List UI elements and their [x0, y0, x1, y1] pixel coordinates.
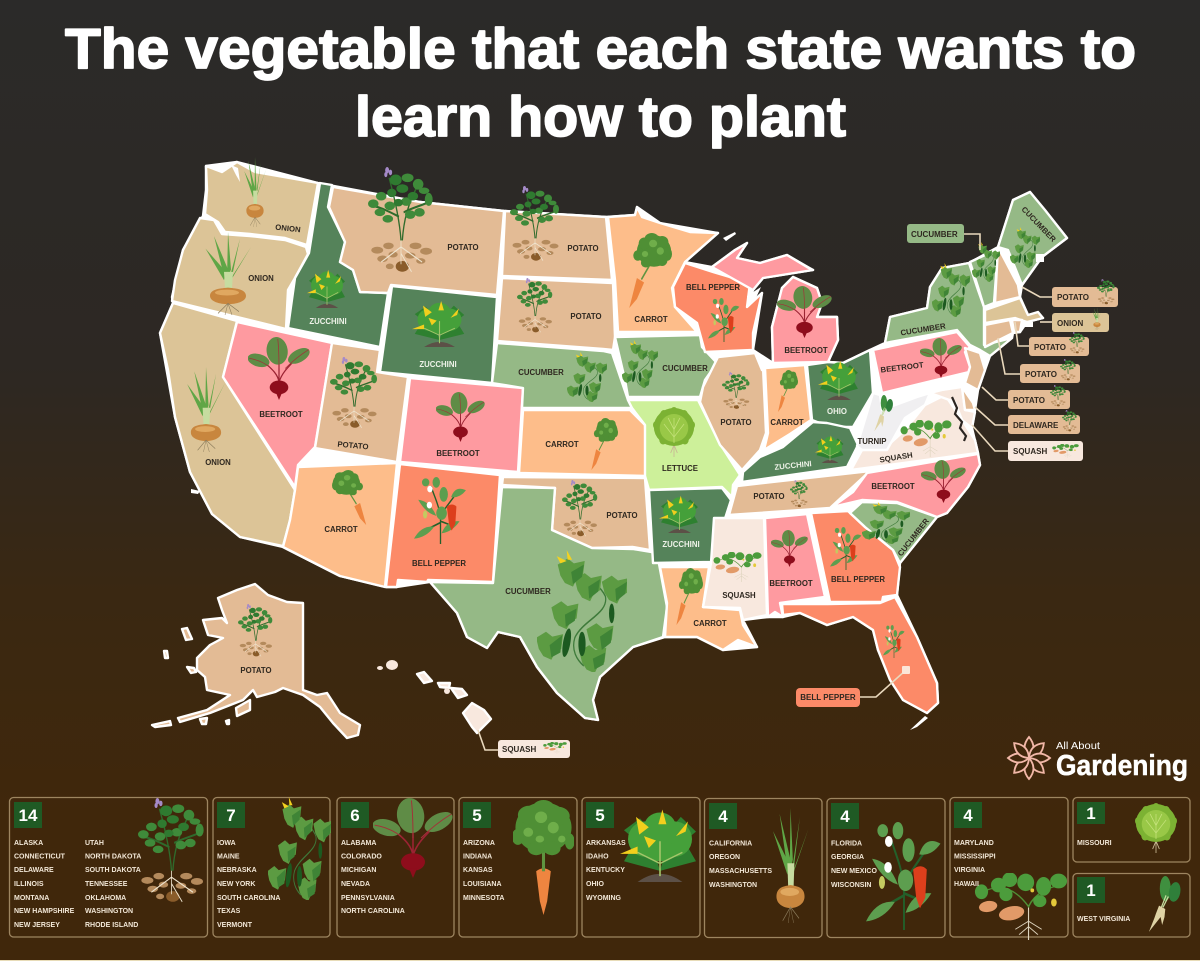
label: Indiana: CARROT [770, 418, 804, 427]
icon: potato, Illinois [722, 372, 749, 409]
icon: squash, Virginia [901, 420, 951, 457]
state: Connecticut [985, 320, 1013, 347]
label: Oklahoma: POTATO [606, 511, 638, 520]
callout: Hawaii squash: SQUASH [502, 745, 536, 754]
icon: potato, South Dakota [517, 278, 552, 332]
callout: Delaware potato [975, 407, 1080, 434]
label: West Virginia: TURNIP [857, 437, 887, 446]
callout: Massachusetts onion: ONION [1057, 319, 1083, 328]
panel: potato, 14 states: NORTH DAKOTA [85, 854, 141, 860]
callout: Vermont cucumber: CUCUMBER [911, 230, 958, 239]
panel: beetroot, 6 states: ALABAMA [341, 840, 376, 847]
icon: carrot, Kansas [591, 418, 618, 470]
callout: Hawaii squash [478, 730, 570, 758]
label: Kansas: CARROT [545, 440, 579, 449]
label: Texas: CUCUMBER [505, 587, 551, 596]
state: Utah [315, 343, 408, 462]
state: Wyoming [380, 286, 497, 383]
state: Michigan upper peninsula [712, 243, 813, 290]
label: Wisconsin: BELL PEPPER [686, 283, 740, 292]
panel: beetroot, 6 states: NORTH CAROLINA [341, 908, 405, 915]
panel: potato, 14 states: NEW JERSEY [14, 922, 60, 929]
panel: carrot, 5 states: 5 [472, 806, 482, 825]
callout: Connecticut potato: POTATO [1025, 370, 1057, 379]
icon: onion, Oregon [206, 232, 251, 315]
panel: squash, 4 states: MARYLAND [954, 840, 994, 847]
panel: bell pepper, 4 states [827, 798, 945, 938]
icon: carrot, Arizona [332, 470, 366, 525]
callout: Florida bell pepper: BELL PEPPER [800, 693, 856, 702]
state: Idaho [288, 183, 388, 347]
panel: onion, 4 states: WASHINGTON [709, 882, 757, 889]
coastal fragments [191, 165, 1044, 730]
panel: carrot, 5 states: KANSAS [463, 867, 493, 874]
state: Oregon [172, 218, 308, 329]
icon: zucchini, Idaho [307, 270, 345, 308]
icon: potato, Utah [330, 357, 377, 428]
state: Nevada [223, 322, 332, 487]
panel: onion, 4 states: OREGON [709, 854, 740, 861]
panel: squash, 4 states: MISSISSIPPI [954, 854, 996, 860]
state: Iowa [615, 335, 717, 397]
state: Alaska [178, 584, 360, 738]
panel: carrot, 5 states [459, 798, 577, 937]
icon: cucumber, Texas [536, 550, 629, 673]
state: Vermont [970, 249, 998, 307]
state: Rhode Island [1012, 320, 1022, 332]
panel: lettuce, 1 state: MISSOURI [1077, 840, 1112, 847]
label: Tennessee: POTATO [753, 492, 785, 501]
panel: beetroot, 6 states: 6 [350, 806, 360, 825]
callout: Florida bell pepper [796, 666, 910, 707]
label: New York: CUCUMBER [900, 321, 947, 337]
panel: squash, 4 states: VIRGINIA [954, 867, 985, 874]
logo: All About Gardening [1008, 737, 1188, 782]
panel: carrot, 5 states: LOUISIANA [463, 881, 502, 888]
panel: zucchini, 5 states: KENTUCKY [586, 867, 625, 874]
label: Montana: POTATO [447, 243, 479, 252]
label: Oregon: ONION [248, 274, 274, 283]
icon: cucumber, Maine [1010, 227, 1041, 268]
icon: lettuce, Missouri [653, 407, 695, 457]
icon: potato, Tennessee [790, 480, 808, 507]
icon: bell pepper, Wisconsin [708, 298, 739, 342]
panel: potato, 14 states: CONNECTICUT [14, 854, 66, 860]
callout: New Hampshire potato [1022, 279, 1118, 307]
callout: Rhode Island potato [1015, 322, 1089, 356]
icon: cucumber, South Carolina [862, 502, 911, 544]
state: Tennessee [729, 471, 870, 515]
panel: zucchini, 5 states: 5 [595, 806, 605, 825]
label: Alabama: BEETROOT [769, 579, 813, 588]
state: South Carolina [850, 502, 937, 563]
panel: lettuce, 1 state: 1 [1086, 804, 1096, 823]
label: Michigan: BEETROOT [784, 346, 828, 355]
icon: squash, Mississippi [713, 552, 762, 582]
panel: cucumber, 7 states: NEBRASKA [217, 867, 257, 874]
label: South Carolina: CUCUMBER [896, 516, 931, 558]
state: Illinois [700, 353, 766, 470]
panel: beetroot, 6 states: MICHIGAN [341, 867, 376, 874]
label: Kentucky: ZUCCHINI [774, 459, 812, 472]
label: Georgia: BELL PEPPER [831, 575, 885, 584]
icon: bell pepper, New Mexico [414, 477, 466, 544]
icon: bell pepper, Florida [883, 625, 905, 658]
icon: cucumber, Iowa [622, 340, 659, 388]
panel: zucchini, 5 states: ARKANSAS [586, 840, 626, 847]
label: Missouri: LETTUCE [662, 464, 698, 473]
title: learn how to plant [355, 85, 846, 149]
state: Michigan lower peninsula [772, 277, 838, 363]
panel: zucchini, 5 states: IDAHO [586, 854, 609, 860]
state: Wisconsin [673, 263, 762, 352]
label: Ohio: OHIO [827, 407, 847, 416]
icon: cucumber, Vermont [972, 242, 1001, 282]
panel: beetroot, 6 states: COLORADO [341, 854, 382, 860]
brand text: All About [1056, 740, 1100, 752]
icon: zucchini, Kentucky [815, 436, 844, 463]
icon: potato, North Dakota [510, 186, 559, 261]
label: Louisiana: CARROT [693, 619, 727, 628]
callout: New Hampshire potato: POTATO [1057, 293, 1089, 302]
panel: turnip, 1 state: 1 [1086, 881, 1096, 900]
state: Oklahoma [502, 477, 650, 550]
callout: New Jersey potato [982, 385, 1070, 409]
map: white land underlay [160, 162, 1067, 720]
label: North Dakota: POTATO [567, 244, 599, 253]
state: Nebraska [492, 343, 632, 408]
callout: Vermont cucumber [907, 224, 980, 250]
state: Delaware [962, 387, 975, 410]
label: Arkansas: ZUCCHINI [662, 540, 700, 549]
state: Texas [430, 487, 667, 720]
icon: potato, Montana [368, 167, 433, 272]
state: Arkansas [649, 488, 731, 563]
label: New Mexico: BELL PEPPER [412, 559, 466, 568]
panel: potato, 14 states: SOUTH DAKOTA [85, 867, 141, 874]
panel: bell pepper, 4 states: NEW MEXICO [831, 868, 877, 875]
icon: potato, Alaska [238, 604, 272, 656]
icon: bell pepper, Georgia [830, 527, 861, 570]
panel: carrot, 5 states: ARIZONA [463, 840, 495, 847]
panel: squash, 4 states: HAWAII [954, 881, 979, 888]
label: California: ONION [205, 458, 231, 467]
state: Arizona [283, 463, 397, 587]
state: Ohio [807, 350, 873, 427]
panel: potato, 14 states: NEW HAMPSHIRE [14, 908, 75, 915]
state: South Dakota [497, 278, 615, 350]
panel: bell pepper, 4 states: GEORGIA [831, 854, 864, 861]
panel: cucumber, 7 states [213, 797, 332, 937]
title: The vegetable that each state wants to [65, 17, 1136, 81]
panel: cucumber, 7 states: MAINE [217, 854, 240, 860]
panel: cucumber, 7 states: 7 [226, 806, 236, 825]
icon: zucchini, Wyoming [412, 301, 464, 347]
label: Iowa: CUCUMBER [662, 364, 708, 373]
state: Colorado [400, 378, 523, 472]
panel: potato, 14 states: 14 [19, 806, 38, 825]
panel: onion, 4 states: CALIFORNIA [709, 840, 752, 848]
label: Washington: ONION [275, 223, 301, 234]
panel: turnip, 1 state: WEST VIRGINIA [1077, 916, 1130, 923]
label: North Carolina: BEETROOT [871, 482, 915, 491]
label: Mississippi: SQUASH [722, 591, 756, 600]
panel: potato, 14 states: DELAWARE [14, 867, 54, 874]
icon: carrot, Indiana [778, 370, 798, 412]
icon: cucumber, New York [932, 263, 971, 318]
icon: turnip, West Virginia [874, 395, 894, 431]
icon: cucumber, Nebraska [567, 352, 608, 402]
callout: Delaware potato: DELAWARE [1013, 421, 1059, 430]
callout: Connecticut potato [998, 338, 1080, 383]
icon: beetroot, Pennsylvania [919, 337, 963, 378]
callout: Maryland squash: SQUASH [1013, 447, 1047, 456]
label: Virginia: SQUASH [879, 450, 914, 465]
label: Colorado: BEETROOT [436, 449, 480, 458]
panel: cucumber, 7 states: TEXAS [217, 908, 241, 915]
label: Utah: POTATO [337, 440, 369, 451]
map: state shapes [152, 162, 1067, 738]
panel: squash, 4 states [950, 798, 1068, 940]
title [65, 17, 1136, 149]
panel: onion, 4 states [704, 798, 822, 938]
icon: beetroot, Alabama [770, 529, 809, 567]
legend [10, 796, 1190, 940]
state: North Dakota [502, 211, 612, 280]
state: New Hampshire [995, 247, 1020, 303]
brand text: Gardening [1056, 750, 1188, 782]
state: Mississippi [703, 518, 767, 620]
icon: carrot, Louisiana [676, 568, 703, 625]
panel: potato, 14 states: MONTANA [14, 895, 49, 902]
panel: turnip, 1 state [1073, 874, 1190, 937]
state: Maryland [930, 387, 975, 428]
panel: potato, 14 states: ALASKA [14, 840, 43, 847]
label: Minnesota: CARROT [634, 315, 668, 324]
state: Alabama [765, 514, 825, 617]
panel: bell pepper, 4 states: FLORIDA [831, 840, 862, 848]
state: North Carolina [832, 454, 980, 517]
label: Pennsylvania: BEETROOT [880, 360, 924, 375]
panel: beetroot, 6 states: PENNSYLVANIA [341, 895, 395, 902]
state: New Jersey [965, 348, 985, 390]
panel: potato, 14 states: ILLINOIS [14, 881, 44, 888]
panel: cucumber, 7 states: IOWA [217, 840, 236, 847]
state: New York [885, 263, 1012, 356]
panel: beetroot, 6 states [337, 796, 456, 937]
panel: bell pepper, 4 states: WISCONSIN [831, 882, 871, 889]
icon: zucchini, Arkansas [659, 496, 698, 533]
state: Georgia [811, 511, 900, 602]
icon: beetroot, Michigan [775, 285, 834, 338]
icon: flower [1008, 737, 1050, 779]
state: Minnesota [608, 207, 718, 332]
panel: squash, 4 states: 4 [963, 806, 973, 825]
label: Wyoming: ZUCCHINI [419, 360, 457, 369]
panel: bell pepper, 4 states: 4 [840, 807, 850, 826]
state: Indiana [764, 365, 811, 450]
label: Nebraska: CUCUMBER [518, 368, 564, 377]
panel: potato, 14 states: TENNESSEE [85, 881, 128, 888]
label: South Dakota: POTATO [570, 312, 602, 321]
state: Maine [998, 192, 1067, 285]
state: Montana [329, 187, 504, 295]
panel: zucchini, 5 states: WYOMING [586, 895, 622, 902]
islands: Alaska [152, 628, 250, 727]
label: Illinois: POTATO [720, 418, 752, 427]
state: Florida [782, 597, 938, 713]
label: Arizona: CARROT [324, 525, 358, 534]
state: Massachusetts [985, 298, 1043, 323]
icon: potato, Oklahoma [562, 480, 597, 536]
state: Virginia [851, 395, 978, 470]
panel: cucumber, 7 states: NEW YORK [217, 881, 255, 888]
label: Idaho: ZUCCHINI [309, 317, 347, 326]
state: California [160, 303, 295, 546]
panel: onion, 4 states: 4 [718, 807, 728, 826]
icon: beetroot, North Carolina [920, 459, 968, 503]
panel: onion, 4 states: MASSACHUSETTS [709, 868, 772, 875]
callout: New Jersey potato: POTATO [1013, 396, 1045, 405]
label: Maine: CUCUMBER [1020, 205, 1058, 244]
map icons and state labels [187, 157, 1058, 675]
icon: onion, California [187, 367, 225, 452]
icon: beetroot, Nevada [246, 336, 312, 400]
state: Washington [205, 162, 318, 245]
icon: carrot, Minnesota [629, 233, 672, 308]
panel: cucumber, 7 states: SOUTH CAROLINA [217, 895, 280, 902]
state: West Virginia [857, 393, 930, 450]
icon: zucchini, Ohio [818, 361, 858, 400]
panel: carrot, 5 states: INDIANA [463, 854, 492, 860]
state: Missouri [628, 400, 740, 497]
state: Louisiana [660, 567, 757, 650]
callout: Rhode Island potato: POTATO [1034, 343, 1066, 352]
Chesapeake Bay [952, 397, 966, 441]
panel: potato, 14 states: RHODE ISLAND [85, 922, 138, 929]
label: Nevada: BEETROOT [259, 410, 303, 419]
panel: lettuce, 1 state [1073, 798, 1190, 862]
panel: beetroot, 6 states: NEVADA [341, 881, 370, 888]
islands: Hawaii [377, 660, 491, 733]
panel: potato, 14 states: UTAH [85, 840, 104, 847]
icon: onion, Washington [244, 157, 266, 227]
icon: beetroot, Colorado [435, 391, 487, 442]
panel: potato, 14 states: OKLAHOMA [85, 895, 126, 902]
state: New Mexico [386, 464, 500, 587]
state: Kansas [519, 410, 647, 476]
panel: potato, 14 states: WASHINGTON [85, 908, 133, 915]
state: Kentucky [742, 422, 858, 482]
panel: potato, 14 states [10, 798, 208, 937]
panel: zucchini, 5 states [582, 798, 700, 937]
panel: zucchini, 5 states: OHIO [586, 881, 604, 888]
callout: Maryland squash [972, 425, 1083, 461]
panel: cucumber, 7 states: VERMONT [217, 922, 253, 929]
panel: carrot, 5 states: MINNESOTA [463, 895, 504, 902]
state: Pennsylvania [873, 332, 970, 393]
label: Alaska: POTATO [240, 666, 272, 675]
callout: Massachusetts onion [1040, 307, 1109, 332]
